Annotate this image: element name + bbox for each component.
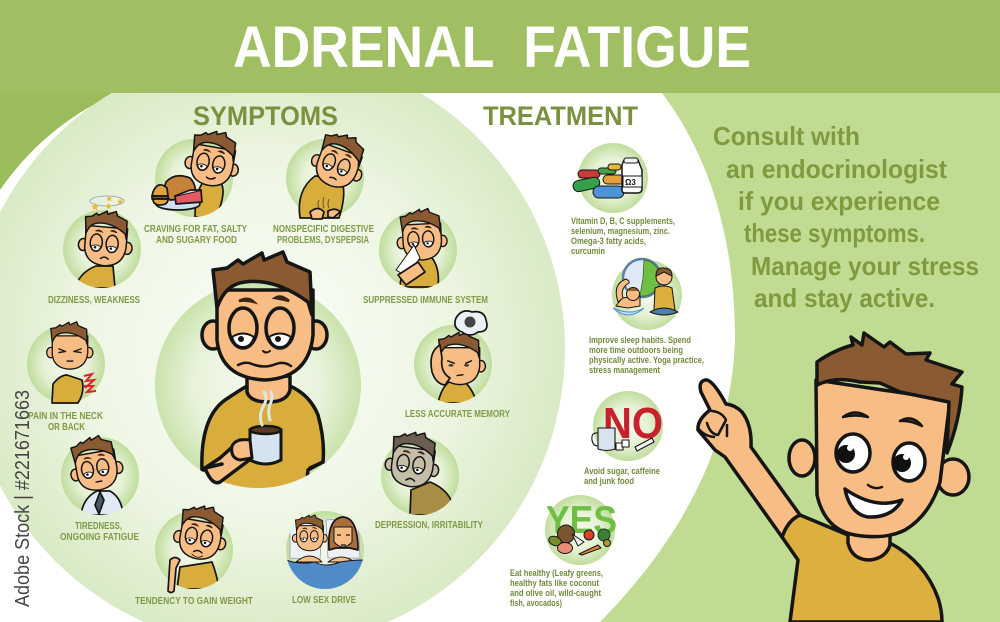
treatment text: sleep and activity: stress management: [589, 365, 660, 375]
treatment text: supplements: [571, 216, 675, 256]
treatment text: supplements: selenium, magnesium, zinc.: [571, 226, 670, 236]
symptom: craving for food: [151, 130, 239, 217]
symptom: dizziness: ★: [91, 202, 100, 212]
heading: symptoms: SYMPTOMS: [193, 101, 338, 131]
central character with mug: [155, 252, 361, 490]
symptom: digestive problems: [286, 126, 373, 219]
treatment icon: YES sign with healthy food: YES: [546, 499, 617, 542]
symptom label: craving: CRAVING FOR FAT, SALTY: [144, 224, 247, 235]
panel: dark green corner: [0, 93, 130, 203]
panel: white treatment area: [0, 93, 735, 622]
symptom: tiredness: [61, 432, 139, 515]
treatment text: avoid: and junk food: [584, 476, 634, 486]
symptom label: tiredness: TIREDNESS,: [75, 521, 122, 532]
treatment icon: NO sign with coffee, sugar and cigarette: [592, 391, 663, 461]
symptom label: pain: [28, 411, 104, 433]
heading: treatment: TREATMENT: [483, 101, 638, 131]
treatment text: supplements: Omega-3 fatty acids,: [571, 236, 646, 246]
symptom: less accurate memory: [414, 311, 492, 403]
symptom label: weight: TENDENCY TO GAIN WEIGHT: [135, 596, 253, 607]
treatment text: sleep and activity: [589, 335, 704, 375]
treatment icon: supplements: [572, 143, 648, 213]
symptom label: depression: DEPRESSION, IRRITABILITY: [375, 520, 483, 531]
stock watermark: Adobe Stock | #221671663: [12, 390, 34, 607]
symptom label: dizziness: DIZZINESS, WEAKNESS: [48, 295, 140, 306]
advice text: these symptoms.: [744, 218, 925, 248]
advice text: Consult with: [713, 121, 860, 151]
symptom label: pain: OR BACK: [48, 422, 86, 433]
treatment text: avoid: [584, 466, 660, 486]
treatment text: eat healthy: [510, 568, 603, 608]
symptom: dizziness: ★: [105, 202, 113, 211]
symptom: low sex drive: [286, 511, 364, 590]
advice text: Manage your stress: [751, 251, 979, 281]
pointing character: [698, 333, 969, 622]
symptom label: tiredness: [60, 521, 139, 543]
treatment icon: YES sign with healthy food: [545, 495, 617, 565]
symptom label: tiredness: ONGOING FATIGUE: [60, 532, 139, 543]
treatment text: eat healthy: Eat healthy (Leafy greens,: [510, 568, 603, 578]
treatment text: avoid: Avoid sugar, caffeine: [584, 466, 660, 476]
symptom label: digestive: [273, 224, 374, 246]
treatment text: eat healthy: healthy fats like coconut: [510, 578, 599, 588]
treatment icon: sleep and yoga: [612, 259, 682, 330]
symptom label: immune: SUPPRESSED IMMUNE SYSTEM: [363, 295, 488, 306]
symptom label: digestive: NONSPECIFIC DIGESTIVE: [273, 224, 374, 235]
symptom label: digestive: PROBLEMS, DYSPEPSIA: [277, 235, 369, 246]
symptom label: pain: PAIN IN THE NECK: [28, 411, 104, 422]
header band: [0, 0, 1000, 93]
symptom: dizziness: [63, 195, 141, 288]
symptom: weight gain: [155, 501, 233, 592]
treatment icon: supplements: Ω3: [625, 178, 636, 187]
symptom: neck and back pain: [27, 322, 105, 403]
symptom: depression: [381, 428, 459, 515]
treatment text: eat healthy: fish, avocados): [510, 598, 562, 608]
treatment text: sleep and activity: physically active. Yoga practice,: [589, 355, 704, 365]
advice text: an endocrinologist: [726, 154, 947, 184]
advice text: if you experience: [738, 186, 940, 216]
treatment text: supplements: curcumin: [571, 246, 605, 256]
advice text: and stay active.: [754, 283, 935, 313]
treatment text: sleep and activity: Improve sleep habits. Spend: [589, 335, 691, 345]
symptom label: low drive: LOW SEX DRIVE: [292, 595, 356, 606]
symptom label: craving: [144, 224, 247, 246]
symptom label: craving: AND SUGARY FOOD: [156, 235, 237, 246]
treatment text: sleep and activity: more time outdoors being: [589, 345, 683, 355]
treatment text: supplements: Vitamin D, B, C supplements,: [571, 216, 675, 226]
panel: symptoms pale circle: [0, 50, 565, 622]
symptom: dizziness: ★: [106, 195, 113, 203]
treatment text: eat healthy: and olive oil, wild-caught: [510, 588, 601, 598]
treatment icon: NO sign with coffee, sugar and cigarette: NO: [603, 399, 663, 448]
symptom label: memory: LESS ACCURATE MEMORY: [405, 409, 510, 420]
symptom: suppressed immune system: [379, 208, 457, 289]
symptom: dizziness: ★: [117, 198, 124, 206]
advice text: [713, 121, 979, 313]
title: ADRENAL FATIGUE: [233, 15, 751, 80]
